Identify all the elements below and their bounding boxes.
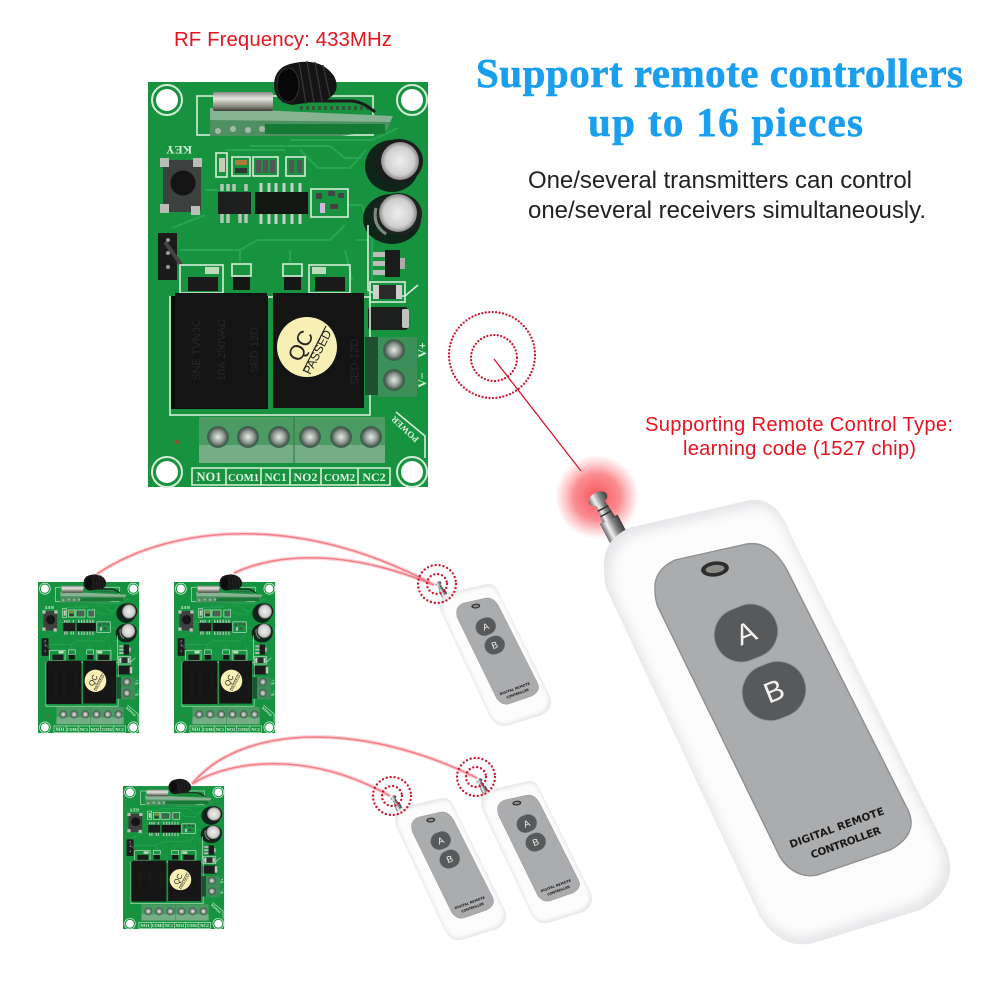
text block: transmitters and receivers: one/several receivers simultaneously. [528, 197, 926, 224]
relays: SED-12D [349, 339, 361, 385]
signal rings and line: main [449, 312, 581, 471]
relays: SNE TVN3C [191, 319, 203, 381]
power terminal [365, 337, 429, 397]
small receiver board 3 [123, 779, 224, 929]
remote brand text: CONTROLLER [809, 825, 883, 861]
text: RF frequency label: RF Frequency: 433MHz [174, 29, 392, 51]
key button: KEY [166, 143, 192, 157]
remote brand text: DIGITAL REMOTE [788, 805, 886, 851]
antenna [586, 488, 633, 554]
small receiver board 2 [174, 574, 275, 733]
transistors and LEDs above relays [180, 264, 350, 293]
mounting holes [152, 85, 427, 487]
QC passed sticker: QC [284, 327, 319, 365]
output terminal block [174, 412, 425, 463]
relays: 10A 250VAC [216, 319, 228, 381]
text: supporting remote control type [645, 414, 953, 460]
relays: SED 12D [249, 327, 261, 373]
white shell [604, 500, 950, 944]
terminal labels: NO1 [196, 470, 222, 484]
terminal labels: NC1 [264, 472, 287, 484]
power terminal: V− [415, 372, 429, 388]
text: supporting remote control type: Supporting Remote Control Type: [645, 414, 953, 436]
integrated circuits [218, 183, 348, 224]
button B: B [759, 673, 789, 710]
small remote 1 [435, 580, 551, 726]
button A [706, 596, 786, 670]
receiver board: large main PCB [148, 61, 429, 487]
QC passed sticker: PASSED [300, 327, 335, 377]
remote control: large main [586, 488, 950, 944]
output terminal block: POWER [389, 414, 421, 444]
signal rings: remote 1 [418, 565, 456, 603]
small remote 2 [390, 794, 506, 940]
text block: transmitters and receivers: One/several transmitters can control [528, 167, 912, 194]
terminal labels: NC2 [362, 470, 386, 484]
signal arcs: one board to two remotes [192, 737, 477, 796]
QC passed sticker [277, 317, 337, 377]
signal arcs: two boards to one remote [97, 534, 434, 585]
terminal labels: COM2 [324, 473, 355, 484]
LED indicator [700, 560, 730, 578]
heading: support remote controllers [476, 50, 963, 145]
regulator, resistor and diode [368, 225, 418, 330]
heading: support remote controllers: Support remote controllers [476, 50, 963, 96]
button B [734, 653, 814, 729]
relays [170, 293, 370, 415]
key button [160, 143, 202, 215]
signal rings: remote 2 [373, 777, 411, 815]
heading: support remote controllers: up to 16 pieces [588, 99, 863, 145]
small receiver board 1 [38, 574, 139, 733]
terminal labels [192, 468, 390, 485]
power terminal: V+ [415, 342, 429, 358]
gray face panel [655, 544, 911, 876]
electrolytic capacitors [363, 139, 423, 244]
text: supporting remote control type: learning code (1527 chip) [683, 438, 916, 460]
SMD component row [216, 153, 305, 177]
jumper header [158, 233, 182, 280]
text block: transmitters and receivers [528, 167, 926, 224]
red antenna glow [555, 455, 639, 539]
RF module with crystal and coil antenna [197, 61, 393, 136]
terminal labels: NO2 [294, 470, 318, 484]
signal rings: remote 3 [457, 758, 495, 796]
button A: A [731, 615, 762, 652]
terminal labels: COM1 [228, 473, 259, 484]
small remote 3 [476, 777, 592, 923]
